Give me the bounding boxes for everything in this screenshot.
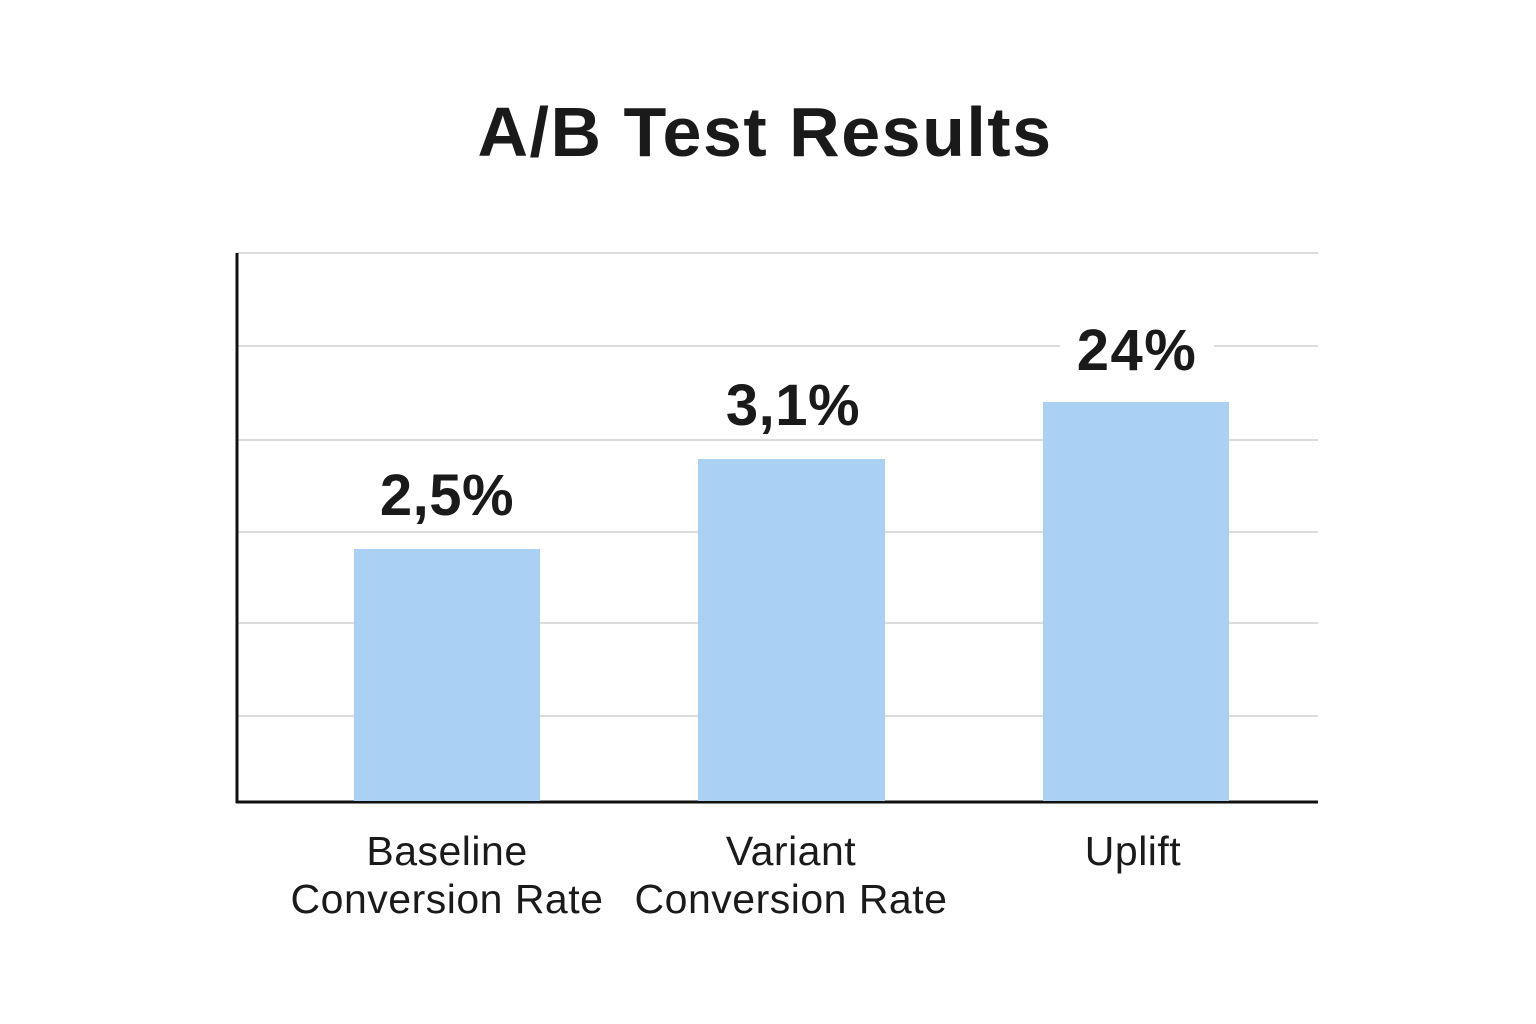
category label: baseline: Conversion Rate (291, 876, 603, 922)
category label: baseline: Baseline (366, 828, 528, 874)
axes (236, 253, 1318, 803)
bar: baseline (354, 549, 540, 801)
bar: uplift (1043, 402, 1229, 801)
bar chart (236, 253, 1318, 922)
value label: baseline: 2,5% (380, 463, 514, 528)
category label: variant: Variant (726, 828, 856, 874)
title: A/B Test Results (477, 93, 1053, 171)
category label: variant: Conversion Rate (635, 876, 947, 922)
category label: uplift: Uplift (1085, 828, 1181, 874)
value label: variant: 3,1% (726, 373, 860, 438)
value label: uplift: 24% (1077, 318, 1197, 383)
bar: variant (698, 459, 885, 801)
